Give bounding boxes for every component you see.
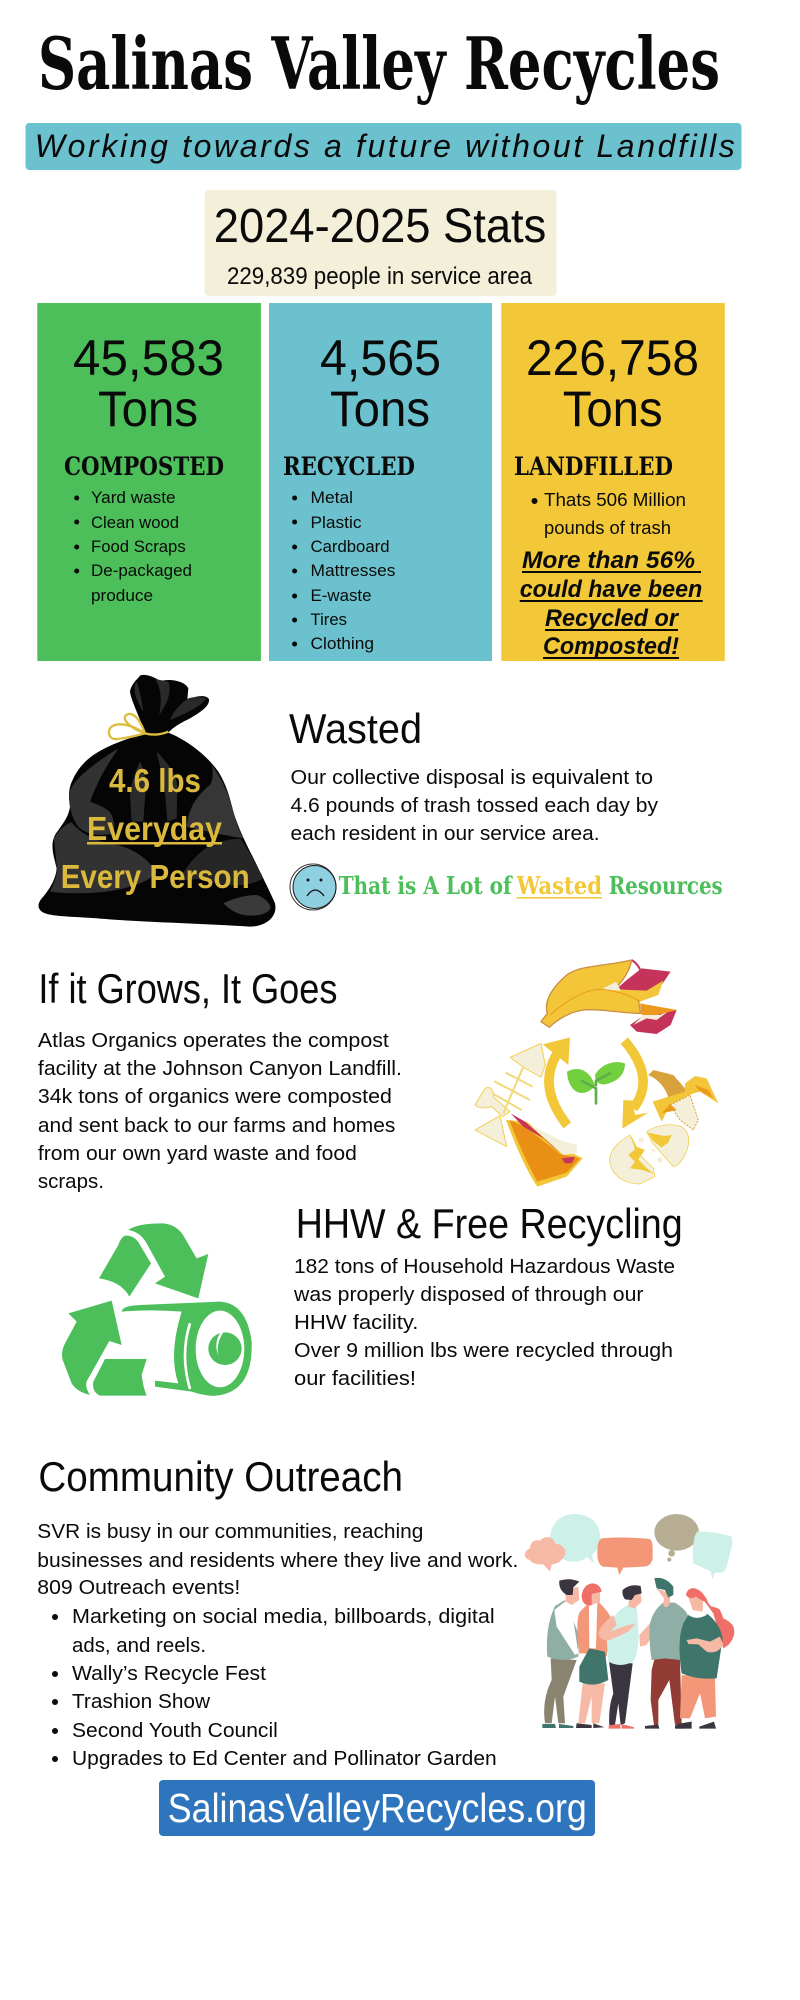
callout: wasted resources (339, 871, 723, 900)
panel: composted: produce (91, 587, 153, 605)
panel: recycled: Metal (310, 489, 353, 507)
panel: landfilled: pounds of trash (544, 518, 671, 538)
list: outreach activities: Wally’s Recycle Fest (72, 1663, 266, 1685)
heading: if it grows: If it Grows, It Goes (38, 965, 337, 1012)
icon: recycling roll (62, 1223, 252, 1396)
list: outreach activities: Marketing on social media, billboards, digital (72, 1606, 495, 1628)
panel: landfilled: could have been (520, 576, 702, 603)
panel: recycled: 4,565 (320, 330, 441, 386)
callout: wasted resources: That is A Lot of (339, 871, 513, 900)
heading: wasted: Wasted (289, 705, 422, 752)
text: compost description: scraps. (38, 1171, 104, 1193)
icon: sad face (290, 864, 336, 910)
banana peel right (648, 1070, 718, 1130)
text: compost description: and sent back to our farms and homes (38, 1115, 395, 1137)
heading: hhw: HHW & Free Recycling (296, 1200, 683, 1247)
panel: composted: De-packaged (91, 562, 192, 580)
text: hhw description: was properly disposed of through our (293, 1284, 644, 1306)
drumstick (506, 1113, 583, 1187)
panel: landfilled: 226,758 (526, 330, 699, 386)
text: compost description: 34k tons of organics were composted (38, 1086, 392, 1108)
panel: composted: COMPOSTED (64, 452, 224, 481)
tagline banner: Working towards a future without Landfills (35, 128, 735, 164)
person 4 (645, 1578, 688, 1729)
text: wasted description: each resident in our service area. (290, 823, 600, 845)
text: hhw description (293, 1256, 675, 1390)
speech bubbles (525, 1514, 733, 1579)
callout: wasted resources: Wasted (516, 871, 602, 900)
list: outreach activities (52, 1606, 497, 1770)
list: outreach activities: ads, and reels. (72, 1635, 206, 1657)
text: compost description (38, 1030, 402, 1193)
person 1 (542, 1579, 579, 1728)
text: wasted description (290, 767, 658, 845)
sprout (567, 1062, 625, 1103)
person 3 (598, 1585, 665, 1729)
text: outreach intro: businesses and residents where they live and work. (37, 1550, 518, 1572)
person 2 (576, 1583, 612, 1728)
text: wasted description: 4.6 pounds of trash tossed each day by (290, 795, 658, 817)
icon: trash bag: 4.6 lbs (109, 762, 201, 799)
illustration: people talking (525, 1514, 734, 1729)
text: wasted description: Our collective disposal is equivalent to (290, 767, 653, 789)
icon: compost cycle (475, 960, 718, 1187)
panel: recycled: E-waste (310, 587, 372, 605)
banana (541, 960, 677, 1034)
panel: landfilled: Recycled or (545, 605, 680, 632)
panel: recycled: Tires (310, 611, 347, 629)
panel: recycled: Plastic (310, 514, 362, 532)
list: outreach activities: Upgrades to Ed Center and Pollinator Garden (72, 1748, 497, 1770)
text: outreach intro: SVR is busy in our communities, reaching (37, 1521, 423, 1543)
icon: trash bag: Every Person (61, 858, 250, 895)
fish (475, 1043, 545, 1147)
panel: composted: Food Scraps (91, 538, 186, 556)
panel: landfilled: Composted! (543, 633, 679, 660)
text: hhw description: our facilities! (294, 1368, 416, 1390)
panel: composted: 45,583 (73, 330, 224, 386)
text: outreach intro: 809 Outreach events! (37, 1577, 240, 1599)
website button: SalinasValleyRecycles.org (168, 1785, 587, 1831)
list: outreach activities: Second Youth Council (72, 1720, 278, 1742)
panel: landfilled: Tons (563, 381, 663, 437)
panel: landfilled: More than 56% (522, 547, 695, 574)
panel: recycled: Mattresses (310, 562, 396, 580)
panel: composted: Clean wood (91, 514, 179, 532)
icon: trash bag: Everyday (87, 810, 223, 847)
panel: landfilled: LANDFILLED (514, 452, 673, 481)
icon: trash bag (39, 675, 275, 927)
panel: recycled: Tons (330, 381, 430, 437)
text: hhw description: HHW facility. (294, 1312, 418, 1334)
panel: landfilled (501, 303, 725, 661)
stats heading box: 229,839 people in service area (227, 263, 533, 290)
panel: landfilled: Thats 506 Million (544, 490, 686, 510)
panel: recycled: Cardboard (310, 538, 390, 556)
person 5 (677, 1588, 734, 1729)
panel: composted: Tons (98, 381, 198, 437)
callout: wasted resources: Resources (609, 871, 723, 900)
panel: recycled: RECYCLED (283, 452, 415, 481)
arrows (543, 1037, 648, 1129)
text: outreach intro (37, 1521, 518, 1599)
text: compost description: Atlas Organics operates the compost (38, 1030, 389, 1052)
stats heading box (205, 190, 557, 296)
list: outreach activities: Trashion Show (72, 1691, 211, 1713)
text: compost description: from our own yard waste and food (38, 1143, 357, 1165)
text: hhw description: 182 tons of Household Hazardous Waste (294, 1256, 675, 1278)
panel: composted: Yard waste (91, 489, 176, 507)
heading: community outreach: Community Outreach (38, 1453, 403, 1500)
text: hhw description: Over 9 million lbs were recycled through (294, 1340, 673, 1362)
panel: composted (37, 303, 261, 661)
egg (610, 1125, 689, 1184)
stats heading box: 2024-2025 Stats (214, 200, 546, 253)
panel: recycled (269, 303, 492, 661)
panel: recycled: Clothing (310, 635, 374, 653)
text: compost description: facility at the Johnson Canyon Landfill. (38, 1058, 402, 1080)
